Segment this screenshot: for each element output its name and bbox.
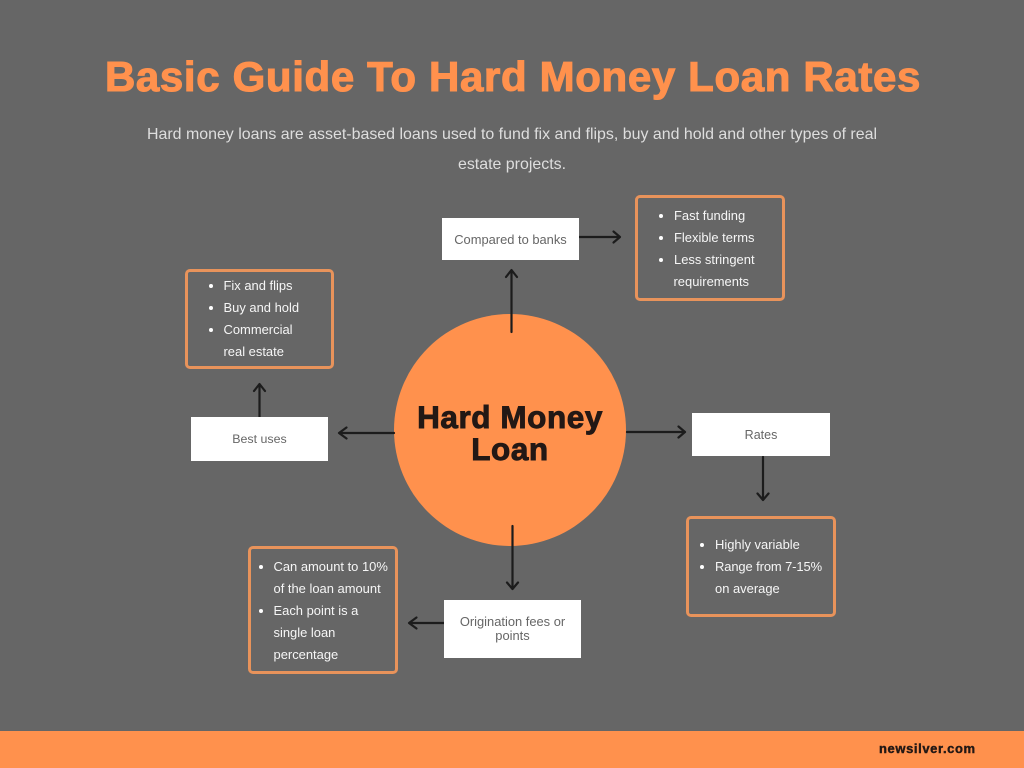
circle label (417, 399, 603, 467)
panel: best uses list: real estate (224, 344, 284, 359)
panel: compared to banks list: Flexible terms (674, 230, 755, 245)
circle label: Hard Money (417, 399, 603, 435)
panel: origination list (248, 546, 398, 674)
box: origination fees (444, 600, 581, 658)
arrow: circle to origination (507, 526, 518, 589)
panel: best uses list (185, 269, 334, 369)
central circle (394, 314, 626, 546)
panel: origination list: of the loan amount (274, 581, 381, 596)
panel: compared to banks list (635, 195, 785, 301)
box: best uses: Best uses (232, 432, 287, 446)
panel: rates list (686, 516, 836, 617)
title: Basic Guide To Hard Money Loan Rates (105, 53, 921, 100)
box: compared to banks: Compared to banks (454, 232, 567, 247)
panel: best uses list: Commercial (224, 322, 293, 337)
box: rates (692, 413, 830, 456)
arrow: circle to compared to banks (506, 270, 517, 332)
arrow: best uses to list (254, 384, 265, 417)
arrow: circle to rates (627, 426, 685, 438)
box: origination fees: Origination fees or (460, 614, 565, 629)
panel: rates list: on average (715, 581, 780, 596)
arrow: compared to banks to list (579, 232, 620, 242)
panel: compared to banks list: Fast funding (674, 208, 745, 223)
panel: rates list: Highly variable (715, 537, 800, 552)
panel: origination list: percentage (274, 647, 338, 662)
circle label: Loan (471, 431, 549, 467)
arrow: circle to best uses (339, 428, 394, 438)
box: rates: Rates (745, 428, 777, 442)
box: compared to banks (442, 218, 579, 260)
panel: best uses list: Buy and hold (224, 300, 299, 315)
panel: compared to banks list: Less stringent (674, 252, 755, 267)
panel: compared to banks list: requirements (674, 274, 749, 289)
panel: origination list: Can amount to 10% (274, 559, 388, 574)
box: origination fees: points (495, 628, 530, 643)
panel: rates list: Range from 7-15% (715, 559, 822, 574)
intro text: Hard money loans are asset-based loans used to fund fix and flips, buy and hold and other types of real estate projects. (147, 126, 877, 173)
box: best uses (191, 417, 328, 461)
arrow: origination to list (409, 618, 444, 628)
footer band (0, 731, 1024, 768)
footer url: newsilver.com (879, 741, 976, 756)
arrow: rates to list (758, 457, 768, 500)
panel: best uses list: Fix and flips (224, 278, 293, 293)
panel: origination list: Each point is a (274, 603, 358, 618)
panel: origination list: single loan (274, 625, 335, 640)
